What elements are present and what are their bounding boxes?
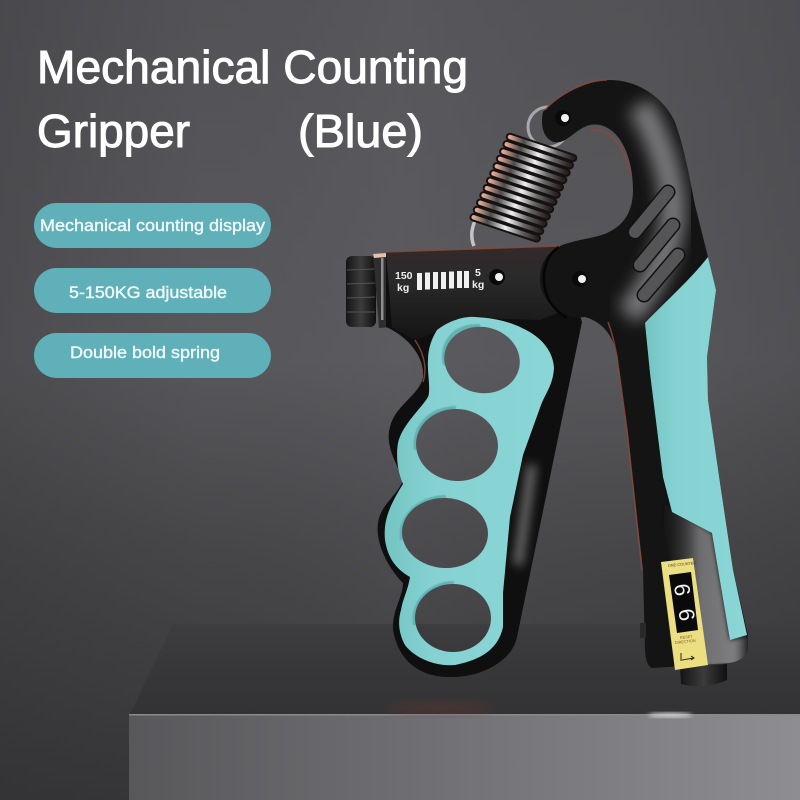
copper rim highlights: [386, 80, 642, 570]
title: Mechanical Counting: [37, 41, 468, 93]
barrel head: [386, 246, 558, 332]
feature pill: mechanical counting display: [34, 203, 271, 248]
handle body with finger holes: [370, 240, 590, 680]
feature pill: double bold spring: Double bold spring: [70, 343, 220, 362]
weight scale: 5: [475, 267, 481, 279]
base foot: [640, 623, 727, 686]
feature pill: adjustable range: [34, 268, 271, 313]
weight scale: [395, 267, 484, 294]
pins: [489, 110, 588, 287]
title: [37, 41, 468, 157]
weight scale: 150: [395, 270, 413, 282]
spring: [472, 107, 573, 247]
lever highlight near grooves: [628, 105, 673, 315]
gripper product illustration: [346, 70, 760, 686]
title: (Blue): [298, 105, 423, 157]
feature pill: mechanical counting display: Mechanical counting display: [40, 216, 266, 235]
counter label: RESET: [680, 635, 693, 640]
counter label: ONE-COUNTER: [668, 561, 696, 568]
finger hole inner rims: [401, 326, 480, 625]
teal finger grip: [385, 317, 554, 665]
teal side panel: [645, 257, 747, 640]
feature pill: double bold spring: [34, 333, 271, 378]
weight scale: kg: [472, 279, 484, 291]
plinth: [129, 624, 800, 800]
grooves: [635, 192, 678, 295]
black grip frame: [378, 253, 582, 678]
counter label: [661, 558, 708, 670]
adjustment knob: [346, 253, 391, 328]
feature pill: adjustable range: 5-150KG adjustable: [69, 283, 227, 302]
counter label: 6: [669, 582, 695, 598]
lever arm: [540, 80, 748, 668]
counter label: 6: [673, 607, 700, 623]
counter label: DIRECTION: [675, 639, 696, 645]
weight scale: kg: [397, 282, 409, 294]
title: Gripper: [37, 105, 190, 157]
pivot arc: [544, 247, 567, 318]
lower grey band: [672, 512, 748, 664]
